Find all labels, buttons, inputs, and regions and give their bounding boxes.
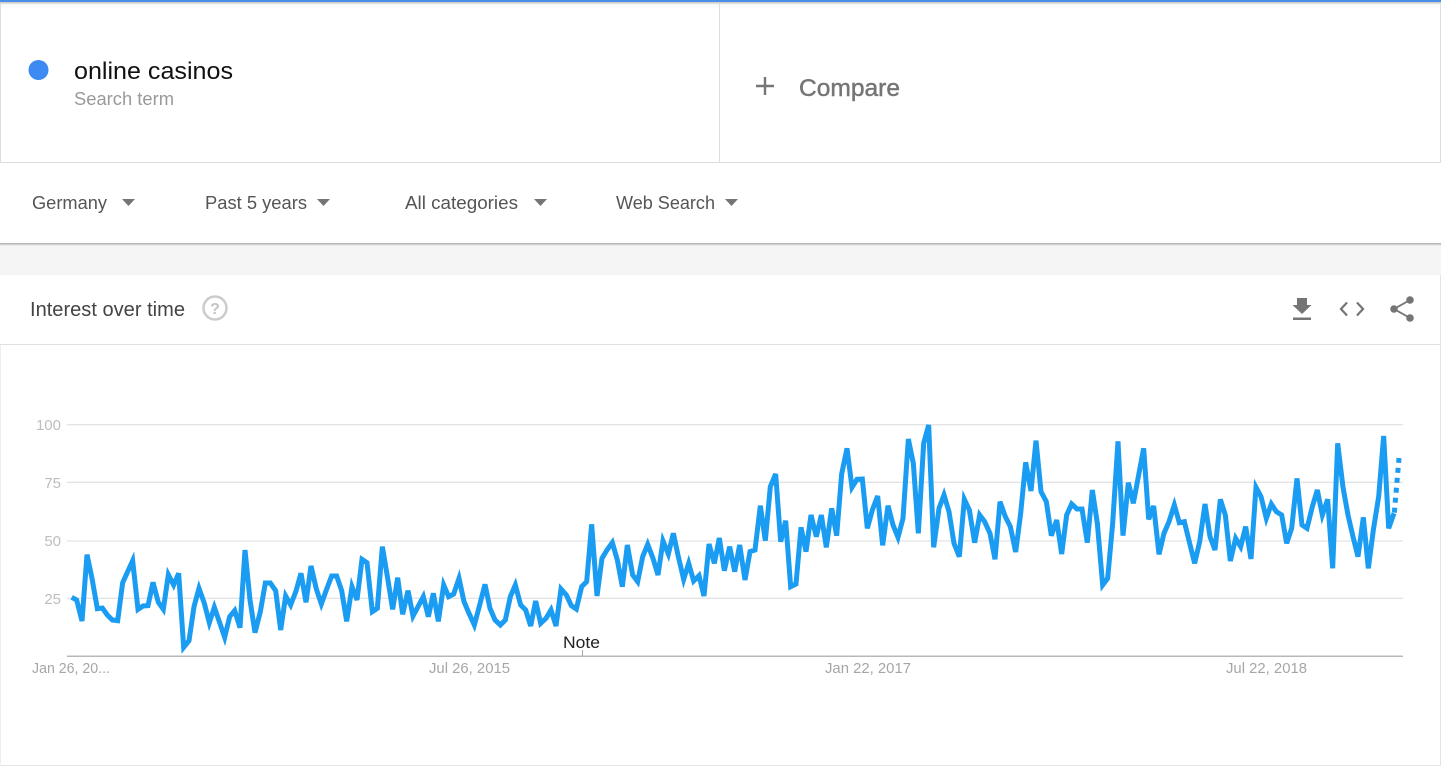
panel: interest over time card [0, 275, 1441, 766]
filter: All categories: All categories [405, 193, 518, 213]
x axis with date labels: Jul 26, 2015 [429, 661, 510, 677]
icon: share [1390, 296, 1414, 322]
line chart: interest over time [32, 417, 1403, 677]
compare label: Compare [799, 75, 900, 102]
gridlines and y axis labels: 25 [44, 591, 61, 608]
icon: help [204, 296, 226, 320]
x axis with date labels: Jan 22, 2017 [825, 661, 911, 677]
filter: Germany: Germany [32, 193, 107, 213]
data line [70, 424, 1402, 654]
filter: Past 5 years: Past 5 years [205, 193, 307, 213]
gridlines and y axis labels: 100 [36, 417, 61, 434]
gridlines and y axis labels [36, 417, 1403, 608]
filter: Web Search: Web Search [616, 193, 715, 213]
top accent bar [0, 0, 1441, 5]
icon: help: ? [210, 301, 220, 318]
icon: series colour dot [28, 60, 48, 80]
gridlines and y axis labels: 75 [44, 475, 61, 492]
panel: filter bar [0, 163, 1441, 243]
x axis with date labels: Jul 22, 2018 [1226, 661, 1307, 677]
heading: interest over time: Interest over time [30, 299, 185, 321]
icon: embed code [1341, 302, 1363, 316]
x axis with date labels [32, 650, 1403, 677]
icon: download [1292, 298, 1312, 320]
note marker: Note [563, 633, 600, 652]
panel: compare card [720, 3, 1440, 162]
search term name: online casinos [74, 58, 233, 85]
search term caption: Search term [74, 89, 174, 109]
page background strip [0, 243, 1441, 275]
icon: plus [756, 77, 774, 95]
gridlines and y axis labels: 50 [44, 533, 61, 550]
x axis with date labels: Jan 26, 20... [32, 661, 110, 677]
panel: search term card [0, 3, 720, 162]
